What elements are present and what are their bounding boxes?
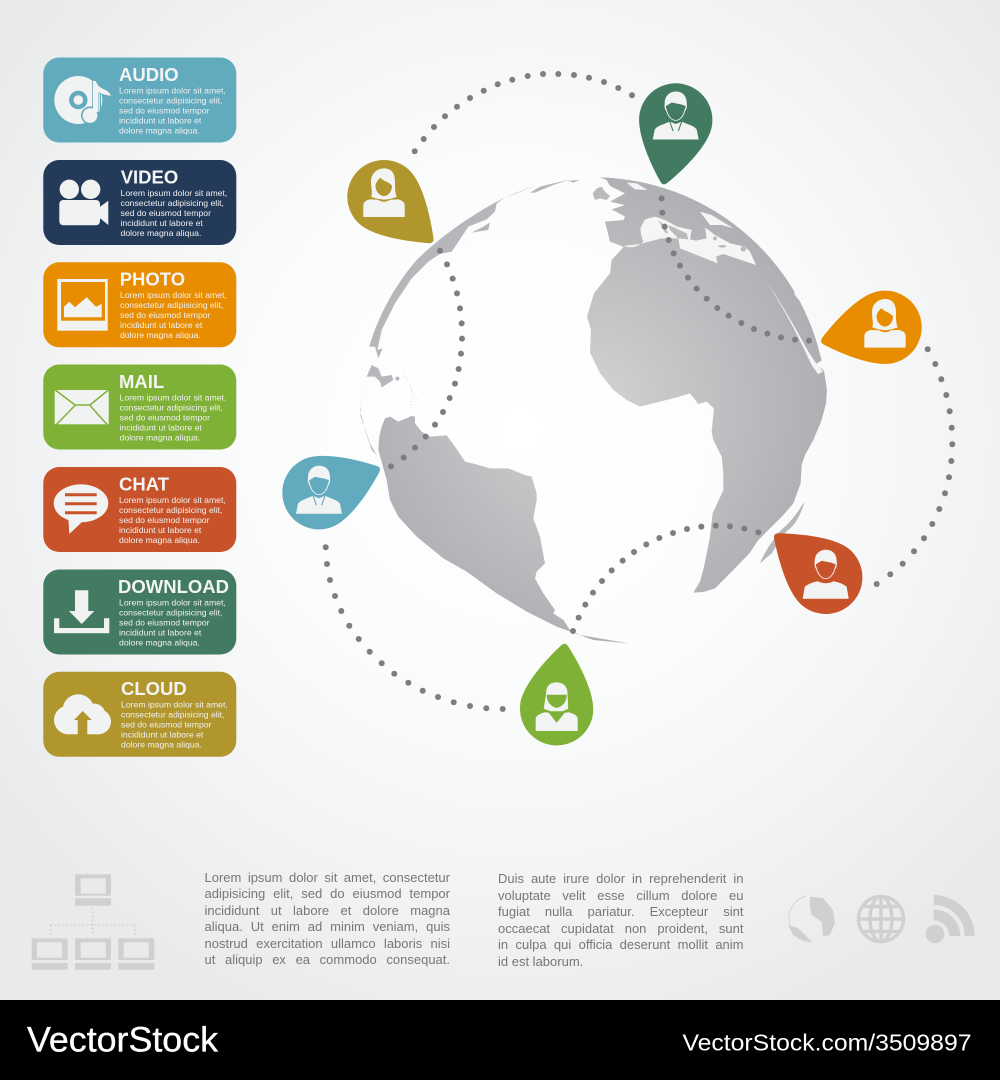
text: cloud description: sed do eiusmod tempor — [121, 719, 212, 729]
icon: disc and music note — [54, 76, 111, 124]
card: cloud — [43, 672, 236, 757]
card: download — [43, 570, 236, 654]
madagascar — [760, 502, 804, 563]
text: mail description: Lorem ipsum dolor sit amet, — [120, 392, 226, 402]
text: video description: consectetur adipisicing elit, — [120, 198, 224, 208]
text block: right paragraph: in culpa qui officia deserunt mollit anim — [498, 937, 744, 952]
text block: right paragraph: Duis aute irure dolor in reprehenderit in — [498, 871, 744, 886]
pin: red, man — [751, 506, 877, 629]
text: audio description: Lorem ipsum dolor sit amet, — [119, 85, 226, 95]
central america and caribbean — [360, 365, 417, 455]
text: mail description: incididunt ut labore et — [120, 422, 202, 432]
text: video description: sed do eiusmod tempor — [120, 208, 211, 218]
text block: right paragraph: id est laborum. — [498, 954, 583, 968]
dotted route: green pin to orange pin — [659, 195, 812, 344]
text: audio description: sed do eiusmod tempor — [119, 105, 210, 115]
text: chat description: consectetur adipisicing elit, — [119, 505, 222, 515]
text block: right paragraph: voluptate velit esse cillum dolore eu — [498, 888, 744, 902]
text: download description: Lorem ipsum dolor sit amet, — [119, 597, 226, 607]
south america — [378, 416, 628, 643]
text: download description: consectetur adipisicing elit, — [119, 607, 222, 617]
text: video description: Lorem ipsum dolor sit amet, — [120, 188, 227, 198]
text: download description: dolore magna aliqua. — [119, 637, 200, 647]
text: chat description: sed do eiusmod tempor — [119, 515, 210, 525]
text: photo description: consectetur adipisicing elit, — [120, 300, 223, 310]
text block: right paragraph: fugiat nulla pariatur. Excepteur sint — [498, 904, 744, 919]
dotted route: bottom left arc — [323, 544, 506, 712]
text: audio description: incididunt ut labore et — [119, 115, 202, 125]
text block: right paragraph: occaecat cupidatat non proident, sunt — [498, 920, 744, 936]
text: chat description: dolore magna aliqua. — [119, 535, 200, 545]
icon: grid globe — [858, 896, 904, 942]
text: cloud description: incididunt ut labore et — [121, 729, 204, 739]
icon: rss feed — [926, 900, 970, 943]
text block: left paragraph: aliqua. Ut enim ad minim veniam, quis — [204, 919, 450, 934]
dotted route: top arc — [412, 71, 635, 154]
text: photo description: incididunt ut labore et — [120, 320, 203, 330]
dotted route: olive pin to blue pin — [388, 248, 465, 469]
text: photo description: dolore magna aliqua. — [120, 330, 201, 340]
text: photo description: Lorem ipsum dolor sit amet, — [120, 290, 227, 300]
text block: left paragraph: nostrud exercitation ullamco laboris nisi — [204, 936, 450, 950]
card: audio — [43, 58, 236, 142]
icon: download arrow — [54, 590, 109, 633]
pin: orange, woman — [813, 283, 929, 377]
heading: mail: MAIL — [119, 371, 164, 392]
dotted route: lime pin to red pin — [570, 523, 761, 634]
dotted route: right arc — [874, 346, 955, 587]
icon: envelope — [55, 390, 109, 425]
text: audio description: consectetur adipisicing elit, — [119, 95, 222, 105]
icon: photo frame — [57, 279, 108, 331]
heading: video: VIDEO — [121, 166, 178, 188]
mediterranean and black sea — [593, 183, 756, 265]
heading: audio: AUDIO — [119, 64, 179, 85]
text: mail description: consectetur adipisicing elit, — [120, 402, 223, 412]
text block: left paragraph: ut aliquip ex ea commodo consequat. — [204, 952, 450, 967]
text: chat description: Lorem ipsum dolor sit amet, — [119, 495, 226, 505]
text: cloud description: consectetur adipisicing elit, — [121, 709, 224, 719]
pin: olive, woman — [332, 145, 458, 269]
text: download description: incididunt ut labore et — [119, 627, 202, 637]
text: audio description: dolore magna aliqua. — [119, 125, 200, 135]
text: cloud description: Lorem ipsum dolor sit amet, — [121, 699, 228, 709]
heading: download: DOWNLOAD — [118, 576, 229, 597]
card: mail — [43, 364, 236, 450]
text block: left paragraph: incididunt ut labore et dolore magna — [204, 902, 450, 918]
icon: computer network — [32, 874, 154, 970]
footer bar — [0, 1000, 1000, 1080]
icon: cloud upload — [54, 694, 111, 734]
text block: left paragraph: adipisicing elit, sed do eiusmod tempor — [204, 886, 450, 901]
icon: speech bubble — [54, 484, 108, 534]
heading: chat: CHAT — [119, 474, 170, 494]
text block: right paragraph — [498, 871, 744, 968]
text: mail description: sed do eiusmod tempor — [120, 412, 210, 422]
text: video description: dolore magna aliqua. — [120, 228, 201, 238]
heading: photo: PHOTO — [120, 269, 185, 290]
north america and greenland band — [369, 197, 505, 358]
pin: lime green, woman — [516, 639, 601, 750]
icon: earth globe — [788, 896, 835, 943]
heading: cloud: CLOUD — [121, 678, 187, 699]
text: download description: sed do eiusmod tempor — [119, 617, 210, 627]
image id: VectorStock.com/3509897 — [682, 1030, 972, 1056]
card: chat — [43, 467, 236, 552]
globe map — [360, 177, 827, 643]
text: mail description: dolore magna aliqua. — [120, 432, 200, 442]
text block: left paragraph — [204, 870, 450, 967]
brand logo text: VectorStock — [27, 1020, 218, 1060]
card: photo — [43, 262, 236, 347]
pin: blue, man in suit — [271, 434, 393, 540]
africa and eurasia — [587, 177, 827, 593]
text: photo description: sed do eiusmod tempor — [120, 310, 211, 320]
icon: video camera — [59, 180, 108, 225]
text: video description: incididunt ut labore et — [120, 218, 203, 228]
red sea — [766, 281, 823, 374]
text: chat description: incididunt ut labore et — [119, 525, 202, 535]
card: video — [43, 160, 236, 245]
text: cloud description: dolore magna aliqua. — [121, 739, 202, 749]
pin: dark green, man in suit — [627, 77, 719, 191]
text block: left paragraph: Lorem ipsum dolor sit amet, consectetur — [204, 870, 450, 884]
